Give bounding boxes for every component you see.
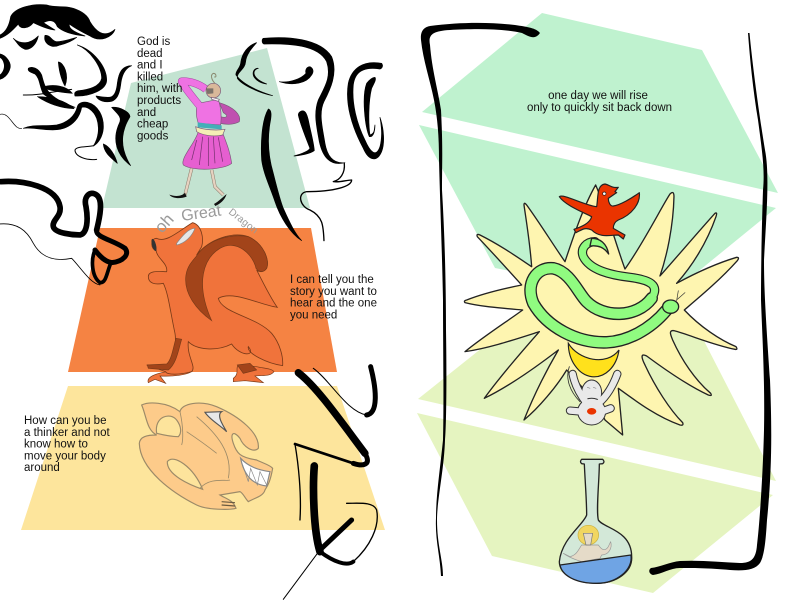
text: God is dead: him, with (137, 83, 182, 95)
text: I can tell you: you need (290, 309, 337, 321)
text: God is dead: goods (137, 130, 169, 142)
text: How can you be a thinker: a thinker and not (24, 427, 110, 439)
bracket: left black frame (421, 23, 540, 576)
text: How can you be a thinker: move your body (24, 450, 106, 462)
text: God is dead: and (137, 107, 156, 119)
illustration: yellow crescent moon (568, 343, 619, 377)
panel: orange trapezoid tier (68, 228, 337, 372)
text: God is dead: killed (137, 71, 163, 83)
text: I can tell you: story you want to (290, 286, 377, 298)
scribble: lower right black strokes (283, 367, 377, 599)
dragon feet (148, 365, 274, 383)
text: one day we will rise: only to quickly sit back down (527, 102, 672, 114)
text: God is dead: cheap (137, 119, 168, 131)
text: God is dead: God is (137, 36, 170, 48)
bracket: right black frame (649, 33, 771, 575)
text: How can you be a thinker: How can you be (24, 415, 106, 427)
panel: lower mint hexagon half (419, 125, 776, 301)
text: God is dead: dead (137, 48, 163, 60)
text: I can tell you: hear and the one (290, 298, 377, 310)
illustration: flask with figure (559, 459, 632, 583)
panel: lower pale green hexagon half (417, 413, 773, 593)
scribble: mid left thick squiggle (0, 181, 127, 285)
illustration: pale orange creature (139, 403, 273, 509)
handwritten title: oh Great Dragon: Great (180, 202, 223, 225)
text: I can tell you: I can tell you the (290, 274, 374, 286)
text: God is dead: and I (137, 60, 163, 72)
panel: yellow trapezoid tier (21, 386, 385, 530)
text: one day we will rise: one day we will rise (548, 90, 648, 102)
handwritten title: oh Great Dragon: oh (151, 210, 178, 237)
text: How can you be a thinker: around (24, 462, 60, 474)
illustration: woman in pink skirt (169, 73, 240, 206)
illustration: yellow sun (464, 185, 738, 435)
illustration: green snake (531, 238, 685, 342)
illustration: red bird (559, 184, 639, 239)
scribble: top left black strokes (0, 5, 132, 166)
panel: green trapezoid tier (102, 48, 310, 208)
handwritten title: oh Great Dragon: Dragon (226, 207, 260, 236)
illustration: orange dragon (147, 223, 283, 383)
panel: upper pale green hexagon half (418, 300, 776, 481)
handwritten title: oh Great Dragon (151, 202, 260, 237)
illustration: grey figure (568, 367, 617, 425)
text: How can you be a thinker: know how to (24, 439, 88, 451)
panel: top mint hexagon half (422, 13, 778, 193)
scribble: top right black strokes (236, 38, 384, 241)
text: God is dead: products (137, 95, 181, 107)
